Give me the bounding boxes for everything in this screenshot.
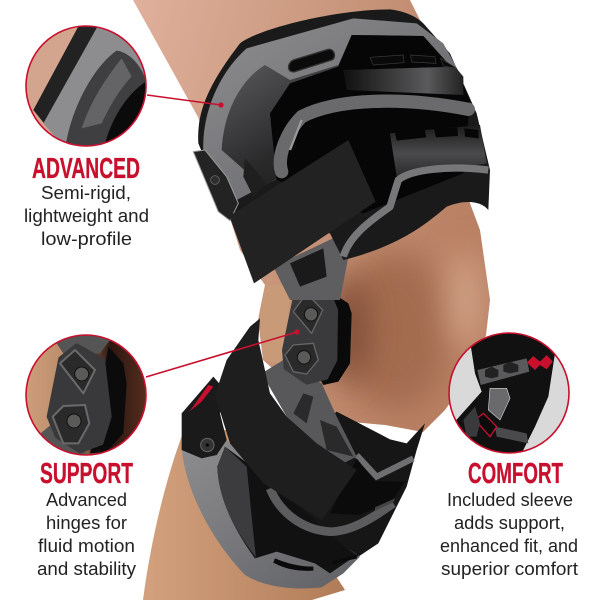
lower frame	[270, 488, 393, 532]
lower screw	[201, 438, 214, 452]
hinge body	[283, 283, 337, 383]
detail circle: sleeve	[450, 334, 568, 452]
upper brace	[193, 9, 490, 300]
brace	[182, 9, 490, 588]
upper hinge link	[273, 233, 350, 300]
thigh and knee skin	[133, 0, 490, 432]
rear padding, lower	[263, 412, 425, 567]
upper strap	[229, 140, 376, 283]
upper slots	[289, 49, 335, 72]
description: enhanced fit, and	[440, 536, 578, 556]
description: fluid motion	[38, 536, 135, 556]
description	[440, 490, 578, 579]
description: Semi-rigid,	[41, 183, 131, 203]
upper padding	[198, 9, 490, 260]
detail circle: shell edge	[26, 26, 146, 146]
detail circle: hinge	[26, 336, 146, 454]
circle ring	[26, 335, 146, 455]
description: Advanced	[46, 490, 127, 510]
circle ring	[26, 26, 146, 146]
lower leg skin	[143, 430, 345, 600]
lower shell slots	[273, 554, 358, 571]
knee shading	[258, 250, 479, 410]
hinge and lower brace	[182, 280, 425, 588]
lower link	[262, 360, 357, 470]
lower band of upper shell	[390, 125, 487, 177]
description: lightweight and	[24, 206, 149, 226]
description	[37, 490, 136, 579]
description: hinges for	[46, 513, 127, 533]
gray lower frame	[343, 168, 488, 257]
hinge lower pivot	[285, 343, 318, 374]
lower strap	[215, 318, 357, 520]
description: low-profile	[41, 229, 132, 249]
upper shell gray band	[203, 18, 463, 200]
lower shell outer	[182, 440, 360, 588]
red accent	[189, 385, 213, 412]
callout: advanced	[20, 20, 224, 249]
description: adds support,	[454, 513, 565, 533]
callout: support	[20, 329, 300, 579]
heading: SUPPORT	[40, 458, 133, 490]
black core	[270, 35, 470, 213]
circle ring	[449, 333, 569, 453]
leader dot	[218, 102, 224, 108]
lower buckle	[182, 377, 227, 458]
description: superior comfort	[441, 559, 578, 579]
buckle screw	[211, 176, 219, 184]
upper shiny band	[343, 67, 463, 95]
description: Included sleeve	[447, 490, 573, 510]
heading: ADVANCED	[32, 153, 140, 185]
callout: comfort	[440, 330, 580, 579]
leader line	[146, 332, 297, 377]
lower band slots	[395, 127, 479, 141]
gray frame	[280, 101, 468, 172]
lower shell inner	[217, 447, 357, 573]
leader dot	[294, 329, 300, 335]
hinge back plate	[317, 293, 352, 385]
description	[24, 183, 149, 249]
hinge upper pivot	[293, 293, 323, 333]
description: and stability	[37, 559, 136, 579]
left buckle	[193, 150, 238, 221]
inner clip	[243, 158, 267, 197]
leg photo	[133, 0, 490, 600]
leader line	[147, 95, 221, 105]
upper link	[280, 280, 342, 293]
upper shell inner	[222, 35, 463, 187]
